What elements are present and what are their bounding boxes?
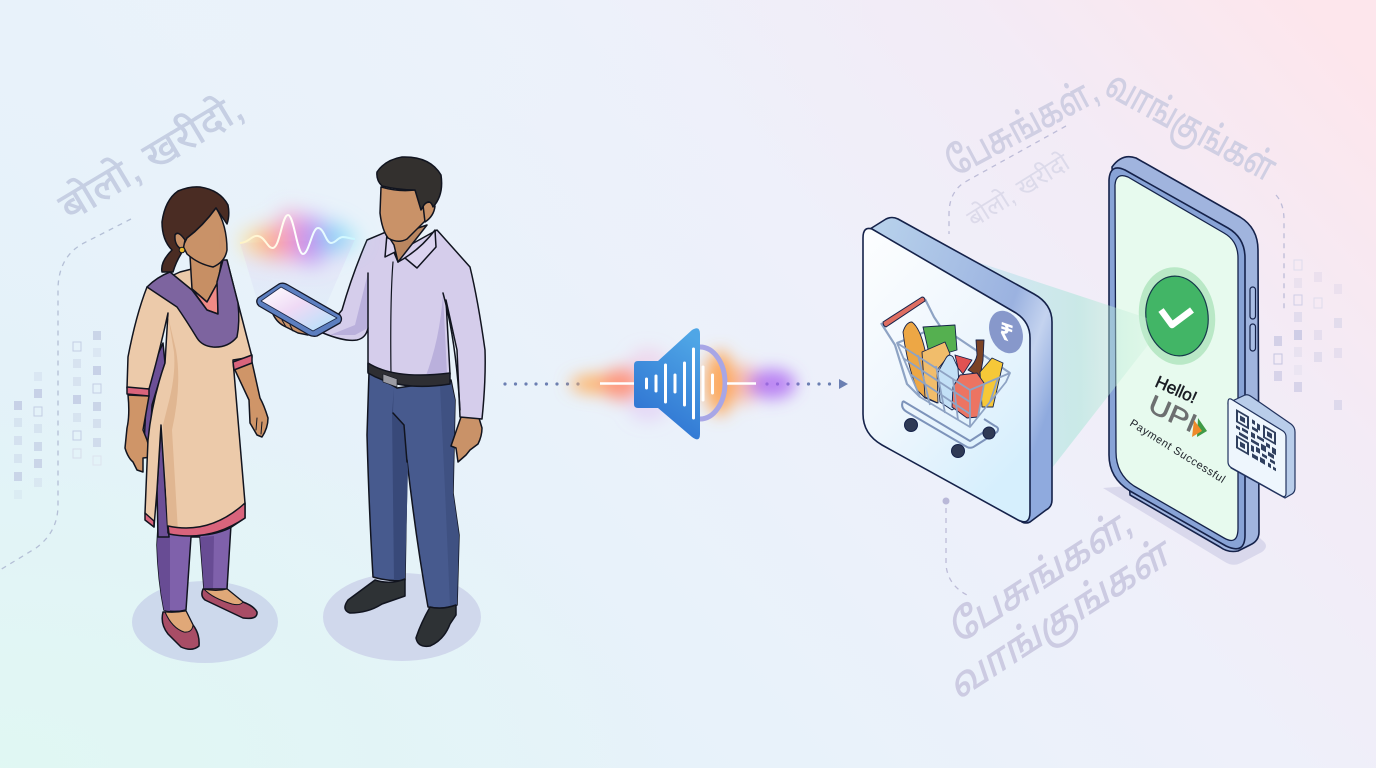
speaker icon xyxy=(600,328,756,439)
woman neck and head xyxy=(162,187,229,314)
cart back wires and handle xyxy=(881,299,1010,397)
loaf xyxy=(922,342,950,403)
speaker glow xyxy=(570,348,796,422)
dashed connector: left xyxy=(0,219,131,570)
man collar xyxy=(385,230,436,268)
Tamil slogan: bottom: வாங்குங்கள் xyxy=(940,530,1184,711)
QR code xyxy=(1236,409,1276,471)
man shirt xyxy=(323,230,485,419)
Tamil heading: top right: பேசுங்கள், xyxy=(939,70,1105,185)
yellow box xyxy=(980,358,1003,407)
phone screen xyxy=(1115,176,1238,540)
man near hand xyxy=(272,310,312,335)
ground shadow: man xyxy=(323,573,481,661)
bread xyxy=(903,322,937,403)
brown bottle xyxy=(968,340,984,377)
woman legs xyxy=(157,425,231,612)
figure: woman xyxy=(125,187,268,649)
man shoes xyxy=(345,579,456,646)
man far hand xyxy=(451,417,482,462)
man belt xyxy=(368,363,450,387)
arrow head xyxy=(839,379,848,389)
side buttons xyxy=(1250,287,1256,351)
cart handle grip xyxy=(883,297,925,327)
glow line xyxy=(600,382,756,385)
Tamil heading: top right: வாங்குங்கள் xyxy=(1098,64,1283,192)
product card xyxy=(863,218,1052,523)
woman dupatta collar xyxy=(147,260,239,347)
man head xyxy=(377,157,442,241)
Tamil heading: top right xyxy=(939,64,1283,192)
data squares: left xyxy=(14,331,101,499)
man neck xyxy=(388,225,427,262)
hello text: Hello! xyxy=(1152,372,1200,407)
success badge xyxy=(1133,262,1221,370)
Tamil slogan: bottom: பேசுங்கள், xyxy=(940,502,1141,653)
phone shadow xyxy=(1103,480,1266,565)
check mark xyxy=(1161,310,1192,325)
cart front wires xyxy=(897,343,1010,427)
woman hands xyxy=(125,362,268,472)
dashed connectors: right xyxy=(946,126,1284,596)
phone side edge xyxy=(1112,157,1259,552)
speaker body xyxy=(634,328,700,439)
woman back scarf xyxy=(144,343,165,445)
figure: man xyxy=(272,157,485,646)
UPI logo: UPI xyxy=(1147,388,1198,440)
data squares: right xyxy=(1274,260,1342,410)
hand-held phone xyxy=(257,283,342,336)
woman kurta xyxy=(127,260,252,536)
connector dot xyxy=(942,498,950,504)
man trousers xyxy=(367,372,459,608)
water bottle xyxy=(938,355,960,410)
voice hologram above phone xyxy=(240,210,358,335)
cart wheels xyxy=(904,418,995,458)
voice bars xyxy=(646,349,712,418)
speaker ring xyxy=(700,347,725,419)
light beam xyxy=(240,239,355,335)
light beam: card to phone xyxy=(977,262,1148,468)
cart lower frame xyxy=(902,401,998,448)
shopping cart xyxy=(881,297,1010,458)
small Hindi caption: बोलो, खरीदो xyxy=(962,147,1075,233)
rupee badge xyxy=(983,306,1029,358)
card face xyxy=(863,228,1030,522)
dotted flow arrow xyxy=(503,379,848,389)
green packet xyxy=(923,325,957,358)
phone front bezel xyxy=(1109,168,1245,549)
woman shoes xyxy=(162,589,257,649)
payment phone xyxy=(1109,157,1259,552)
heading: Hindi phrase top left: बोलो, खरीदो, xyxy=(51,84,251,230)
card side edge xyxy=(870,218,1052,523)
ground shadow: woman xyxy=(132,581,278,663)
colour glow xyxy=(241,210,358,265)
QR tag xyxy=(1228,395,1295,498)
sound wave line xyxy=(240,215,355,254)
rupee badge: ₹ xyxy=(998,319,1014,348)
red pack xyxy=(955,355,972,374)
red box xyxy=(952,373,984,418)
payment status text: Payment Successful xyxy=(1127,417,1227,486)
